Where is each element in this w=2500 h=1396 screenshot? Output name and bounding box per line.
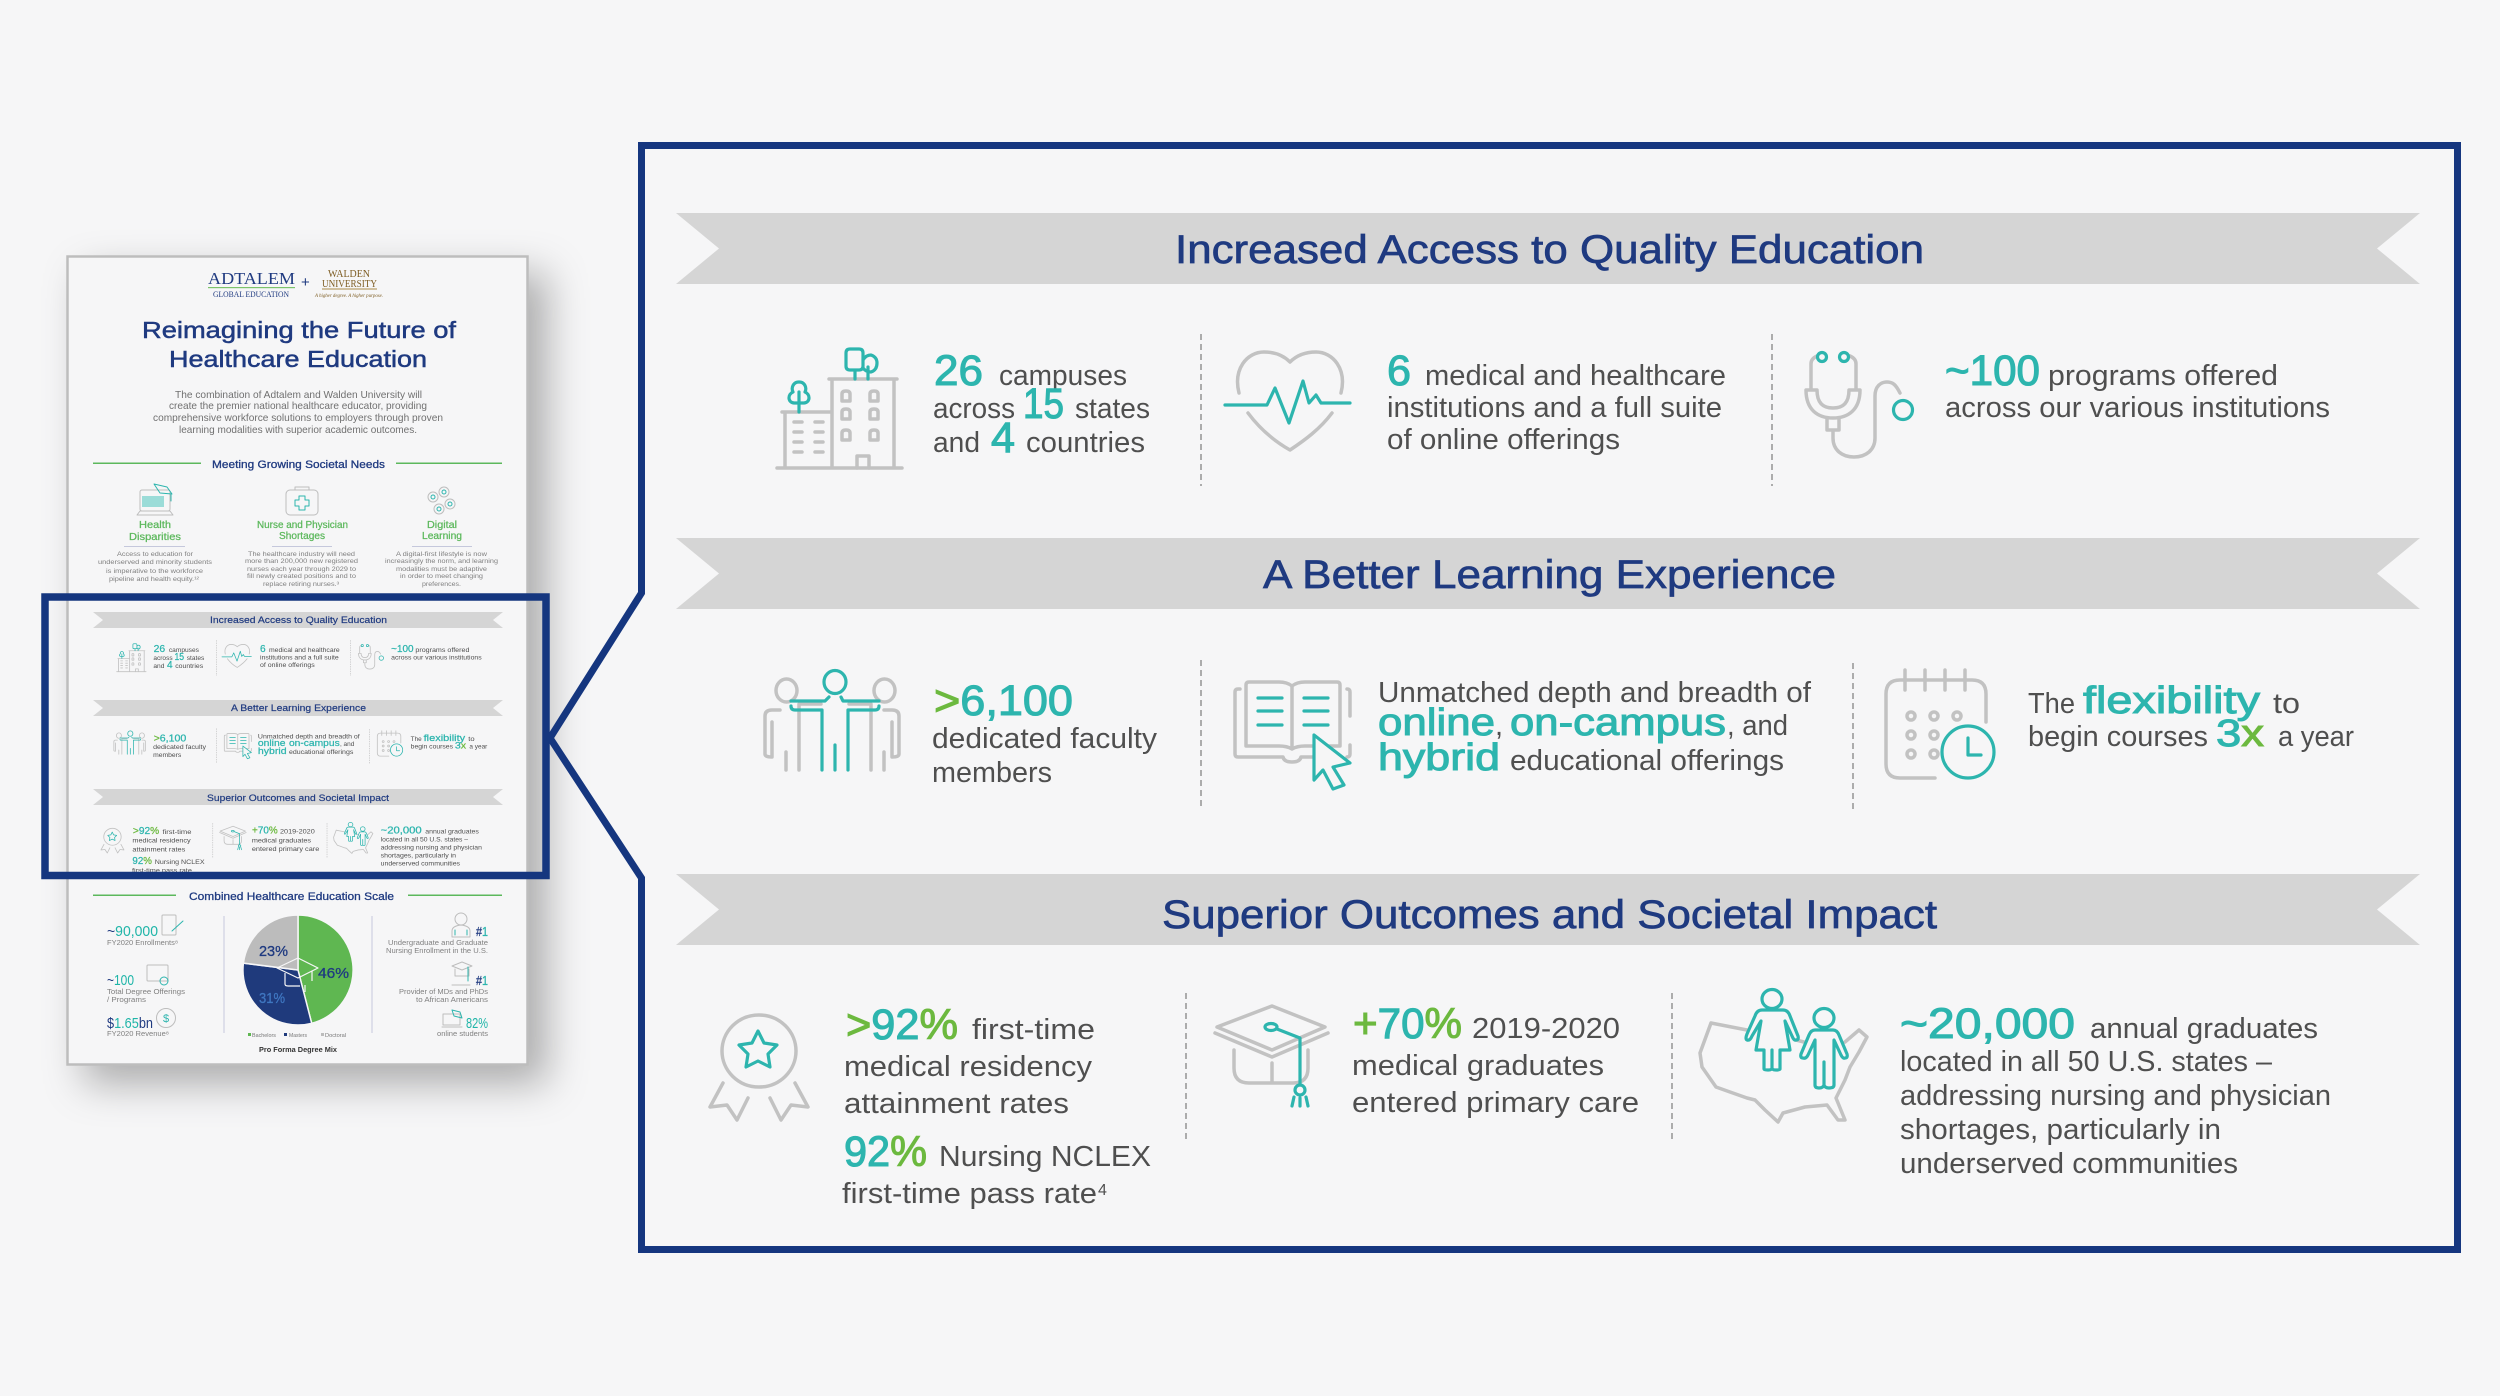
- stat text: >6,100: [934, 677, 1073, 725]
- metric: programs: / Programs: [107, 995, 146, 1004]
- stat text: , and: [1727, 710, 1788, 742]
- metric: revenue: FY2020 Revenue⁸: [107, 1029, 169, 1038]
- pie chart: pro forma degree mix: [243, 915, 353, 1054]
- description: increasingly the norm, and learning: [385, 559, 498, 565]
- description: fill newly created positions and to: [247, 574, 357, 580]
- stat text: flexibility: [2083, 680, 2260, 722]
- metric: online students: [437, 1010, 488, 1038]
- stat text: addressing nursing and physician: [1900, 1080, 2331, 1112]
- icon: medical case: [286, 487, 318, 515]
- thumbnail row: Superior Outcomes stats: 2019-2020: [280, 829, 315, 836]
- metric: enrollments: [107, 915, 183, 947]
- stat text: ,: [1495, 710, 1503, 742]
- heading: Meeting Growing Societal Needs: Meeting Growing Societal Needs: [212, 459, 386, 471]
- thumbnail banner: Increased Access: Increased Access to Quality Education: [210, 615, 387, 626]
- thumbnail row: Superior Outcomes stats: entered primary care: [252, 846, 319, 853]
- stat text: 15: [1023, 380, 1064, 428]
- plus sign: +: [301, 274, 310, 291]
- thumbnail row: Increased Access stats: 26: [154, 644, 165, 655]
- stat text: a year: [2278, 721, 2354, 753]
- stat text: [2028, 680, 2354, 755]
- thumbnail row: Increased Access stats: medical and healthcare: [269, 647, 340, 654]
- column: Digital Learning: [385, 487, 498, 588]
- label: Shortages: [279, 531, 325, 542]
- stat text: members: [932, 757, 1052, 789]
- description: [245, 552, 358, 588]
- description: preferences.: [422, 582, 461, 588]
- panel: detail view: [550, 146, 2458, 1250]
- icon: U.S. map with graduates: [1700, 990, 1867, 1122]
- thumbnail row: Increased Access stats: campuses: [169, 647, 200, 654]
- icon: graduation cap: [277, 958, 318, 992]
- stat: flexibility: [1886, 670, 2354, 778]
- pie labels: 23%: [259, 943, 288, 960]
- thumbnail banner: Increased Access: [93, 612, 503, 628]
- stat text: +70%: [1353, 1000, 1462, 1048]
- description: [98, 552, 212, 583]
- thumbnail row: Superior Outcomes stats: underserved communities: [381, 860, 461, 867]
- stat text: 2019-2020: [1472, 1013, 1620, 1045]
- legend: [248, 1033, 346, 1039]
- thumbnail row: Increased Access stats: 6: [260, 644, 266, 655]
- logo: Adtalem Global Education: GLOBAL EDUCATION: [213, 290, 289, 299]
- panel: source document thumbnail: [68, 256, 528, 1064]
- stat text: medical and healthcare: [1425, 360, 1726, 392]
- thumbnail row: Increased Access stats: 4: [167, 660, 173, 671]
- thumbnail banner: Better Learning: A Better Learning Experience: [231, 703, 366, 714]
- thumbnail row: Superior Outcomes stats: Nursing NCLEX: [155, 859, 205, 866]
- stat text: shortages, particularly in: [1900, 1114, 2221, 1146]
- stat text: medical graduates: [1352, 1050, 1604, 1082]
- logo: Adtalem Global Education: ADTALEM: [208, 269, 295, 288]
- section banner: Increased Access to Quality Education: [676, 213, 2420, 284]
- stat text: located in all 50 U.S. states –: [1900, 1046, 2273, 1078]
- thumbnail row: Increased Access stats: ~100: [391, 644, 414, 655]
- stat text: and: [933, 427, 980, 459]
- metric: enrollments: ~90,000: [107, 923, 158, 940]
- thumbnail row: Better Learning stats: on-campus: [289, 738, 340, 748]
- stat text: [1900, 1000, 2331, 1180]
- thumbnail row: Superior Outcomes stats: 92%: [132, 856, 152, 867]
- thumbnail row: Increased Access stats: [117, 640, 482, 676]
- stat text: campuses: [999, 360, 1127, 392]
- metric: revenue: $: [163, 1013, 169, 1025]
- callout frame on thumbnail: [45, 597, 546, 876]
- legend: Doctoral: [325, 1033, 346, 1039]
- metric: nursing enrollment: [386, 913, 488, 955]
- stat: annual graduates: [1700, 990, 2331, 1180]
- thumbnail row: Superior Outcomes stats: ~20,000: [381, 826, 422, 837]
- thumbnail row: Better Learning stats: to: [468, 736, 475, 743]
- section banner: A Better Learning Experience: [676, 538, 2420, 609]
- stat: primary care: [1215, 1000, 1639, 1119]
- logo: Walden University: A higher degree. A higher purpose.: [314, 293, 383, 299]
- thumbnail row: Better Learning stats: educational offerings: [289, 749, 354, 756]
- stat text: [1352, 1000, 1639, 1119]
- icon: graduation cap: [1215, 1006, 1328, 1106]
- description: replace retiring nurses.³: [263, 582, 339, 588]
- description: is imperative to the workforce: [106, 569, 204, 575]
- logo: Walden University: UNIVERSITY: [322, 279, 377, 290]
- thumbnail row: Better Learning stats: Unmatched depth and breadth of: [258, 733, 360, 740]
- metric: enrollments: FY2020 Enrollments⁸: [107, 938, 178, 947]
- description: A digital-first lifestyle is now: [396, 552, 488, 558]
- icon: heart with pulse: [1225, 352, 1350, 450]
- thumbnail row: Increased Access stats: and: [153, 663, 165, 670]
- metric: online students: online students: [437, 1029, 488, 1038]
- left scale metrics: [107, 915, 185, 1038]
- thumbnail row: Superior Outcomes stats: +70%: [252, 826, 278, 837]
- metric: nursing enrollment: Nursing Enrollment in the U.S.: [386, 946, 488, 955]
- thumbnail row: Increased Access stats: programs offered: [415, 647, 470, 654]
- thumbnail row: Increased Access stats: of online offerings: [260, 662, 315, 669]
- stat text: to: [2273, 688, 2300, 720]
- stat text: annual graduates: [2090, 1013, 2318, 1045]
- stat text: 3x: [2216, 713, 2264, 755]
- stat text: across: [933, 393, 1015, 425]
- thumbnail row: Better Learning stats: a year: [469, 744, 488, 751]
- stat: medical institutions: [1225, 347, 1726, 456]
- metric: nursing enrollment: Undergraduate and Graduate: [388, 938, 488, 947]
- label: Digital: [427, 520, 457, 531]
- description: nurses each year through 2029 to: [247, 567, 357, 573]
- metric: revenue: $1.65bn: [107, 1015, 153, 1032]
- thumbnail banner: Superior Outcomes: Superior Outcomes and Societal Impact: [207, 793, 389, 804]
- stat: programs: [1806, 347, 2330, 457]
- stat text: 26: [934, 347, 983, 395]
- metric: programs: [107, 965, 185, 1004]
- stat text: Unmatched depth and breadth of: [1378, 677, 1812, 709]
- stat text: dedicated faculty: [932, 723, 1158, 755]
- stat text: first-time: [972, 1014, 1095, 1046]
- stat text: [933, 347, 1150, 462]
- stat text: on-campus: [1510, 702, 1726, 744]
- stat text: of online offerings: [1387, 424, 1620, 456]
- pie caption: Pro Forma Degree Mix: [259, 1047, 337, 1054]
- arrow: panel frame with connector to thumbnail: [550, 146, 2458, 1250]
- stat text: 92%: [844, 1128, 927, 1176]
- stat text: across our various institutions: [1945, 392, 2330, 424]
- stat text: educational offerings: [1510, 745, 1784, 777]
- thumbnail row: Superior Outcomes stats: attainment rates: [132, 846, 186, 853]
- thumbnail row: Better Learning stats: online: [258, 738, 285, 748]
- document page: [68, 256, 528, 1064]
- thumbnail row: Better Learning stats: members: [153, 752, 182, 759]
- icon: campus buildings: [777, 349, 902, 468]
- thumbnail row: Increased Access stats: states: [187, 655, 205, 662]
- metric: MD and PhD provider: [399, 962, 488, 1004]
- section banner: A Better Learning Experience: A Better Learning Experience: [1263, 553, 1836, 597]
- logo: Walden University: [314, 269, 383, 299]
- metric: programs: ~100: [107, 972, 134, 989]
- document intro text: The combination of Adtalem and Walden University will: [175, 389, 422, 401]
- stat text: medical residency: [844, 1051, 1093, 1083]
- stat text: entered primary care: [1352, 1087, 1639, 1119]
- thumbnail row: Better Learning stats: dedicated faculty: [153, 744, 207, 751]
- icon: stethoscope: [1806, 352, 1912, 457]
- stat text: [842, 1001, 1151, 1210]
- label: Learning: [422, 531, 462, 542]
- pie labels: [259, 943, 349, 1007]
- thumbnail row: Better Learning stats: flexibility: [424, 733, 466, 743]
- metric: MD and PhD provider: Provider of MDs and PhDs: [399, 987, 488, 996]
- description: Access to education for: [117, 552, 193, 558]
- thumbnail row: Superior Outcomes stats: >92%: [133, 826, 159, 837]
- stat text: ~100: [1945, 347, 2040, 395]
- label: [257, 520, 348, 547]
- thumbnail row: Better Learning stats: >6,100: [154, 733, 187, 744]
- metric: nursing enrollment: #1: [476, 924, 488, 939]
- document title: Reimagining the Future of: [142, 317, 457, 343]
- stat text: >92%: [846, 1001, 958, 1049]
- thumbnail row: Better Learning stats: , and: [340, 741, 354, 748]
- pie labels: 31%: [259, 990, 285, 1007]
- thumbnail row: Increased Access stats: across our various institutions: [391, 655, 482, 662]
- stat text: Nursing NCLEX: [939, 1141, 1151, 1173]
- stat text: programs offered: [2048, 360, 2278, 392]
- metric: MD and PhD provider: to African Americans: [416, 995, 488, 1004]
- document intro text: create the premier national healthcare educator, providing: [169, 400, 427, 412]
- thumbnail banner: Better Learning: [93, 700, 503, 716]
- stat text: begin courses: [2028, 721, 2208, 753]
- description: The healthcare industry will need: [248, 552, 355, 558]
- icon: network of people: [428, 487, 455, 514]
- stat text: 6: [1387, 347, 1411, 395]
- stat text: institutions and a full suite: [1387, 392, 1722, 424]
- thumbnail row: Increased Access stats: institutions and a full suite: [260, 655, 339, 662]
- description: in order to meet changing: [400, 574, 483, 580]
- description: more than 200,000 new registered: [245, 559, 358, 565]
- stat text: online: [1378, 702, 1495, 744]
- logo: Walden University: WALDEN: [328, 269, 370, 280]
- legend: Bachelors: [252, 1033, 277, 1039]
- thumbnail row: Increased Access stats: across: [153, 655, 173, 662]
- stat text: hybrid: [1378, 737, 1500, 779]
- document intro text: [153, 389, 443, 436]
- icon: calendar with clock: [1886, 670, 1994, 778]
- section banner: Superior Outcomes and Societal Impact: Superior Outcomes and Societal Impact: [1162, 893, 1937, 937]
- stat text: The: [2028, 688, 2075, 720]
- heading: Combined Healthcare Education Scale: Combined Healthcare Education Scale: [189, 891, 394, 903]
- document intro text: learning modalities with superior academic outcomes.: [179, 424, 417, 436]
- stat text: [1387, 347, 1726, 456]
- thumbnail banner: Superior Outcomes: [93, 789, 503, 805]
- thumbnail row: Superior Outcomes stats: medical graduates: [252, 837, 312, 844]
- label: Nurse and Physician: [257, 520, 348, 531]
- logo: Adtalem Global Education: [208, 269, 295, 299]
- thumbnail row: Superior Outcomes stats: addressing nursing and physician: [381, 844, 482, 851]
- thumbnail row: Increased Access stats: 15: [175, 652, 184, 663]
- thumbnail row: Superior Outcomes stats: first-time: [163, 829, 192, 836]
- document title: Healthcare Education: [169, 346, 427, 372]
- right scale metrics: [386, 913, 488, 1038]
- icon: laptop with cap: [137, 484, 173, 515]
- slice: Masters 31%: [243, 963, 312, 1025]
- description: underserved and minority students: [98, 560, 212, 566]
- label: [124, 520, 185, 547]
- stat text: [1945, 347, 2330, 424]
- legend: Masters: [289, 1033, 308, 1039]
- icon: faculty group: [765, 670, 899, 770]
- icon: award medal: [710, 1015, 808, 1120]
- metric: programs: Total Degree Offerings: [107, 987, 185, 996]
- section banner: Superior Outcomes and Societal Impact: [676, 874, 2420, 945]
- stat text: 4: [991, 414, 1015, 462]
- label: Health: [139, 520, 171, 531]
- thumbnail row: Superior Outcomes stats: located in all 50 U.S. states –: [381, 836, 468, 843]
- stat text: 4: [1098, 1182, 1107, 1199]
- stat: modalities: [1235, 677, 1812, 789]
- stat text: [1378, 677, 1812, 779]
- column: Nurse and Physician Shortages: [245, 487, 358, 588]
- document title: [142, 317, 457, 372]
- label: [412, 520, 472, 547]
- document intro text: comprehensive workforce solutions to employers through proven: [153, 412, 443, 424]
- description: pipeline and health equity.¹²: [109, 577, 199, 583]
- thumbnail row: Better Learning stats: hybrid: [258, 746, 287, 756]
- stat: faculty: [765, 670, 1158, 789]
- section banner: Increased Access to Quality Education: Increased Access to Quality Education: [1175, 228, 1924, 272]
- stat text: countries: [1026, 427, 1145, 459]
- stat text: [932, 677, 1158, 789]
- stat text: states: [1075, 393, 1150, 425]
- thumbnail row: Increased Access stats: countries: [175, 663, 204, 670]
- thumbnail row: Superior Outcomes stats: medical residency: [132, 838, 191, 845]
- thumbnail row: Superior Outcomes stats: annual graduates: [425, 829, 479, 836]
- metric: revenue: [107, 1008, 176, 1038]
- stat: campuses: [777, 347, 1150, 468]
- stat text: ~20,000: [1900, 1000, 2075, 1048]
- description: [385, 552, 498, 588]
- metric: MD and PhD provider: #1: [476, 973, 488, 988]
- stat text: attainment rates: [844, 1088, 1069, 1120]
- label: Disparities: [129, 532, 181, 543]
- thumbnail row: Better Learning stats: 3x: [455, 741, 467, 751]
- slice: Bachelors 46%: [298, 915, 353, 1023]
- description: modalities must be adaptive: [396, 567, 488, 573]
- slice: Doctoral 23%: [243, 915, 298, 970]
- thumbnail row: Better Learning stats: [114, 728, 488, 764]
- thumbnail row: Superior Outcomes stats: first-time pass rate: [132, 868, 192, 875]
- thumbnail row: Superior Outcomes stats: shortages, particularly in: [381, 852, 456, 859]
- metric: online students: 82%: [466, 1015, 488, 1032]
- column: Health Disparities: [98, 484, 212, 583]
- thumbnail row: Better Learning stats: The: [411, 736, 422, 743]
- stat text: first-time pass rate: [842, 1178, 1097, 1210]
- pie labels: 46%: [318, 965, 349, 982]
- thumbnail row: Better Learning stats: begin courses: [411, 744, 454, 751]
- thumbnail row: Superior Outcomes stats: [101, 822, 482, 875]
- stat text: underserved communities: [1900, 1148, 2238, 1180]
- stat: pass rates: [710, 1001, 1151, 1210]
- icon: book with cursor: [1235, 682, 1350, 789]
